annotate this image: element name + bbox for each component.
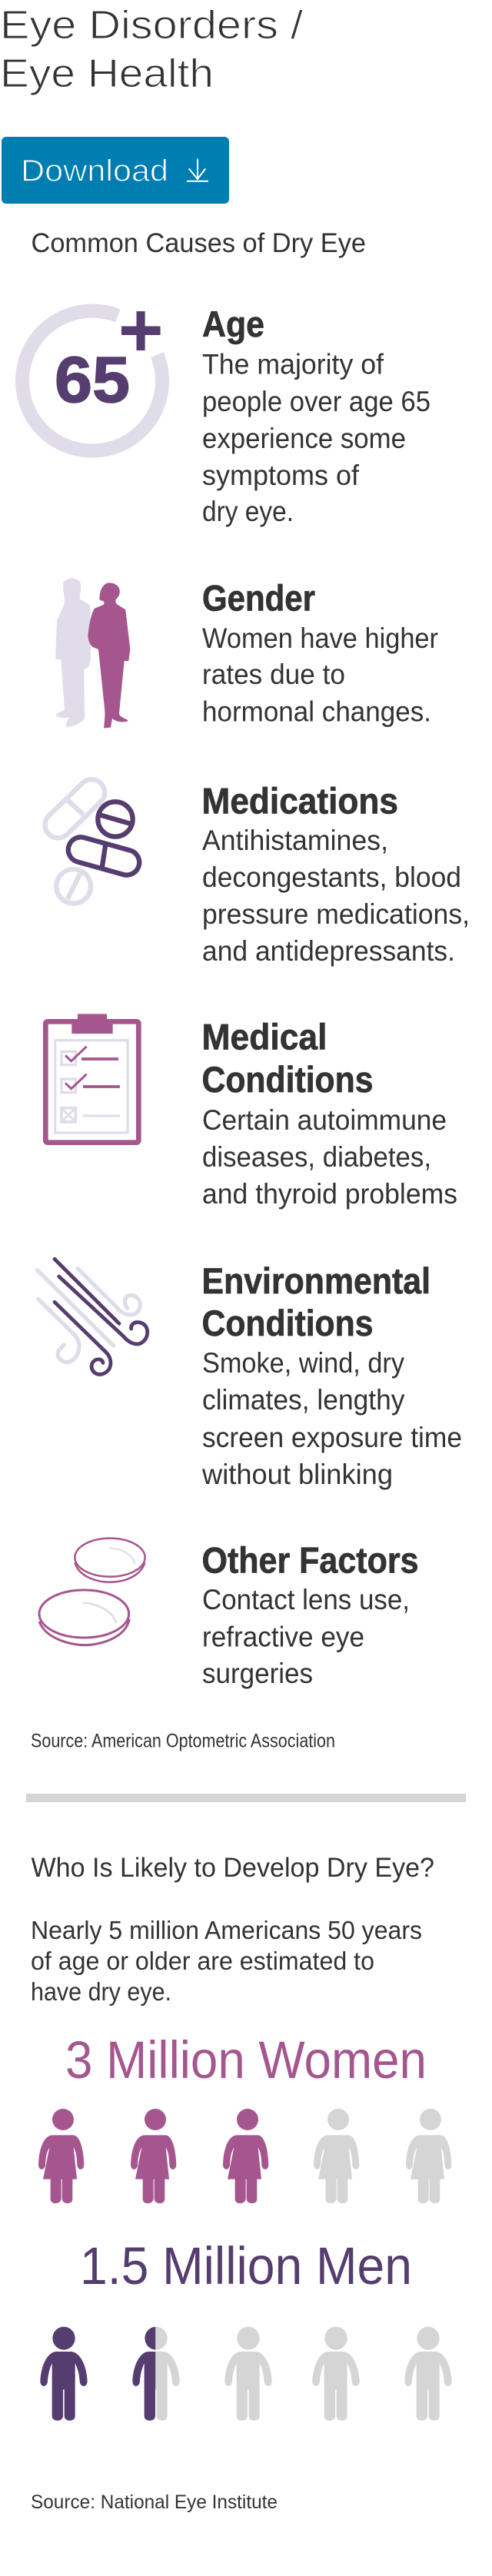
heading: age: Age (202, 304, 264, 344)
title: Eye Health (0, 51, 214, 96)
text: environmental description: climates, lengthy (202, 1384, 405, 1416)
text: age description: The majority of (202, 349, 384, 380)
panel: gender (55, 578, 438, 728)
panel: other factors (39, 1539, 418, 1689)
text: environmental description: without blinking (201, 1459, 393, 1490)
heading: medical conditions: Medical (201, 1016, 327, 1057)
heading: medications: Medications (201, 781, 398, 821)
text: medical conditions description: and thyroid problems (202, 1178, 457, 1210)
icon: man and woman silhouettes (55, 578, 130, 728)
title: Eye Disorders / (0, 3, 304, 48)
text: intro paragraph (31, 1916, 422, 2006)
text: medical conditions description: diseases, diabetes, (202, 1141, 431, 1173)
text: age description: people over age 65 (202, 386, 430, 417)
text: age description: symptoms of (202, 460, 360, 491)
text: environmental description: Smoke, wind, dry (202, 1347, 404, 1379)
text: medications description: and antidepressants. (202, 935, 455, 967)
pictogram: women (38, 2109, 451, 2203)
text: intro paragraph: Nearly 5 million Americans 50 years (31, 1916, 422, 1944)
heading: medical conditions: Conditions (201, 1059, 374, 1100)
text: other factors description: Contact lens use, (202, 1584, 410, 1615)
text: intro paragraph: of age or older are estimated to (31, 1947, 374, 1975)
text: age description (202, 349, 430, 527)
panel: medications (39, 774, 470, 967)
title (0, 3, 304, 96)
text: medications description (202, 825, 470, 967)
text: medical conditions description (202, 1104, 457, 1210)
text: other factors description: surgeries (202, 1658, 313, 1689)
text: age description: dry eye. (202, 496, 294, 527)
text: other factors description: refractive eye (202, 1622, 364, 1652)
heading: other factors: Other Factors (201, 1540, 418, 1580)
heading: medical conditions (201, 1016, 374, 1100)
text: environmental description (201, 1347, 462, 1490)
text: age description: experience some (202, 423, 406, 454)
icon: 65 plus (22, 311, 162, 451)
heading: environmental conditions: Environmental (201, 1260, 430, 1301)
icon: pills (39, 774, 142, 904)
heading: environmental conditions (201, 1260, 430, 1343)
text: gender description: hormonal changes. (202, 696, 431, 728)
heading: 3 million women: 3 Million Women (65, 2030, 427, 2090)
text: gender description: Women have higher (202, 622, 438, 654)
icon: clipboard checklist (45, 1014, 138, 1143)
text: gender description (202, 622, 438, 728)
heading: 1.5 million men: 1.5 Million Men (80, 2236, 412, 2295)
source: national eye institute: Source: National Eye Institute (31, 2491, 278, 2513)
heading: common causes: Common Causes of Dry Eye (31, 228, 366, 258)
text: medications description: Antihistamines, (202, 825, 388, 856)
panel: age (22, 304, 430, 527)
panel: medical conditions (45, 1014, 457, 1210)
icon: wind (37, 1259, 148, 1374)
text: intro paragraph: have dry eye. (31, 1977, 171, 2006)
panel: environmental conditions (37, 1259, 462, 1490)
text: gender description: rates due to (202, 659, 345, 690)
heading: who is likely: Who Is Likely to Develop Dry Eye? (31, 1853, 434, 1883)
source: american optometric association: Source: American Optometric Association (31, 1731, 335, 1752)
download button (2, 137, 229, 204)
text: environmental description: screen exposure time (202, 1422, 462, 1453)
text: medical conditions description: Certain autoimmune (202, 1104, 447, 1136)
text: medications description: decongestants, blood (202, 861, 461, 893)
heading: environmental conditions: Conditions (201, 1303, 374, 1343)
heading: gender: Gender (202, 578, 315, 619)
download button: Download (21, 154, 168, 188)
text: medications description: pressure medications, (202, 898, 470, 930)
text: other factors description (202, 1584, 410, 1689)
pictogram: men (40, 2327, 452, 2421)
icon: contact lenses (39, 1539, 145, 1645)
icon: 65 plus: 65 (55, 344, 130, 416)
